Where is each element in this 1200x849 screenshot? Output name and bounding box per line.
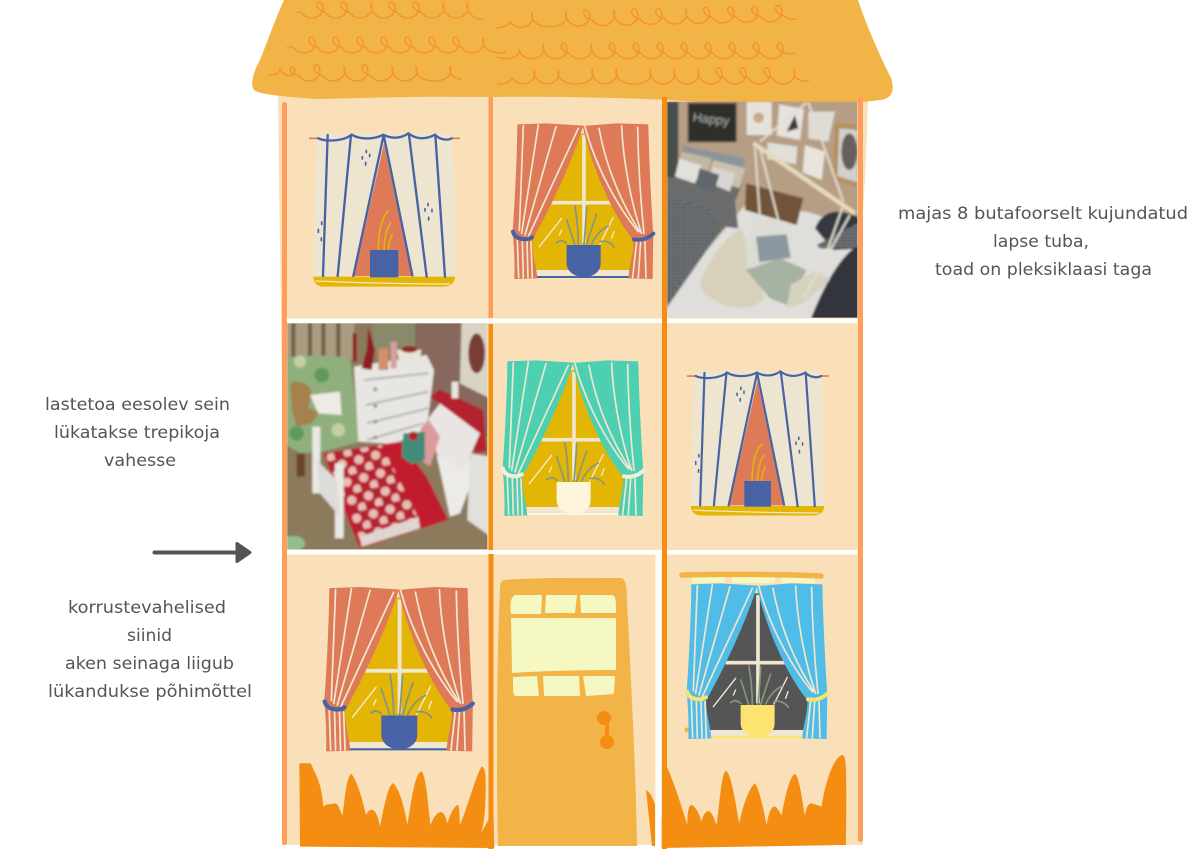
text: sliding wall note: vahesse bbox=[104, 451, 176, 470]
floor dividers and house frame bbox=[282, 97, 863, 849]
window: lace curtains top left bbox=[309, 133, 460, 287]
house wall bbox=[278, 95, 868, 845]
grass blade beside door bbox=[646, 790, 655, 846]
photo: bedroom with hanging chair bbox=[664, 98, 861, 321]
window: coral drapes bottom left bbox=[324, 587, 473, 751]
text: rooms note: majas 8 butafoorselt kujundatud bbox=[898, 204, 1188, 223]
text: sliding wall note bbox=[45, 395, 230, 470]
curtain rod over blue window bbox=[682, 574, 821, 732]
roof bbox=[252, 0, 893, 103]
text: sliding wall note: lastetoa eesolev sein bbox=[45, 395, 230, 414]
text: rooms note: toad on pleksiklaasi taga bbox=[935, 260, 1152, 279]
text: rails note bbox=[48, 598, 252, 701]
window: coral drapes top middle bbox=[513, 123, 653, 279]
text: rooms note bbox=[898, 204, 1188, 279]
door handle bbox=[597, 711, 614, 749]
text: rails note: aken seinaga liigub bbox=[65, 654, 234, 673]
door window panes bbox=[510, 595, 616, 696]
window: blue drapes bottom right bbox=[687, 583, 827, 739]
text: rails note: siinid bbox=[127, 626, 172, 645]
text: sliding wall note: lükatakse trepikoja bbox=[54, 423, 220, 442]
text: rails note: korrustevahelised bbox=[68, 598, 226, 617]
door bbox=[497, 578, 637, 846]
grass right bbox=[662, 755, 846, 848]
grass left bbox=[299, 763, 494, 848]
photo: children's room with red bed bbox=[282, 320, 491, 553]
window: green drapes middle bbox=[503, 360, 643, 516]
arrow bbox=[154, 544, 250, 562]
roof shingle squiggles bbox=[269, 2, 809, 84]
text: rooms note: lapse tuba, bbox=[993, 232, 1089, 251]
window: lace curtains middle right bbox=[687, 371, 829, 515]
text: rails note: lükandukse põhimõttel bbox=[48, 682, 252, 701]
photo: bedroom with hanging chair: Happy bbox=[692, 110, 731, 128]
